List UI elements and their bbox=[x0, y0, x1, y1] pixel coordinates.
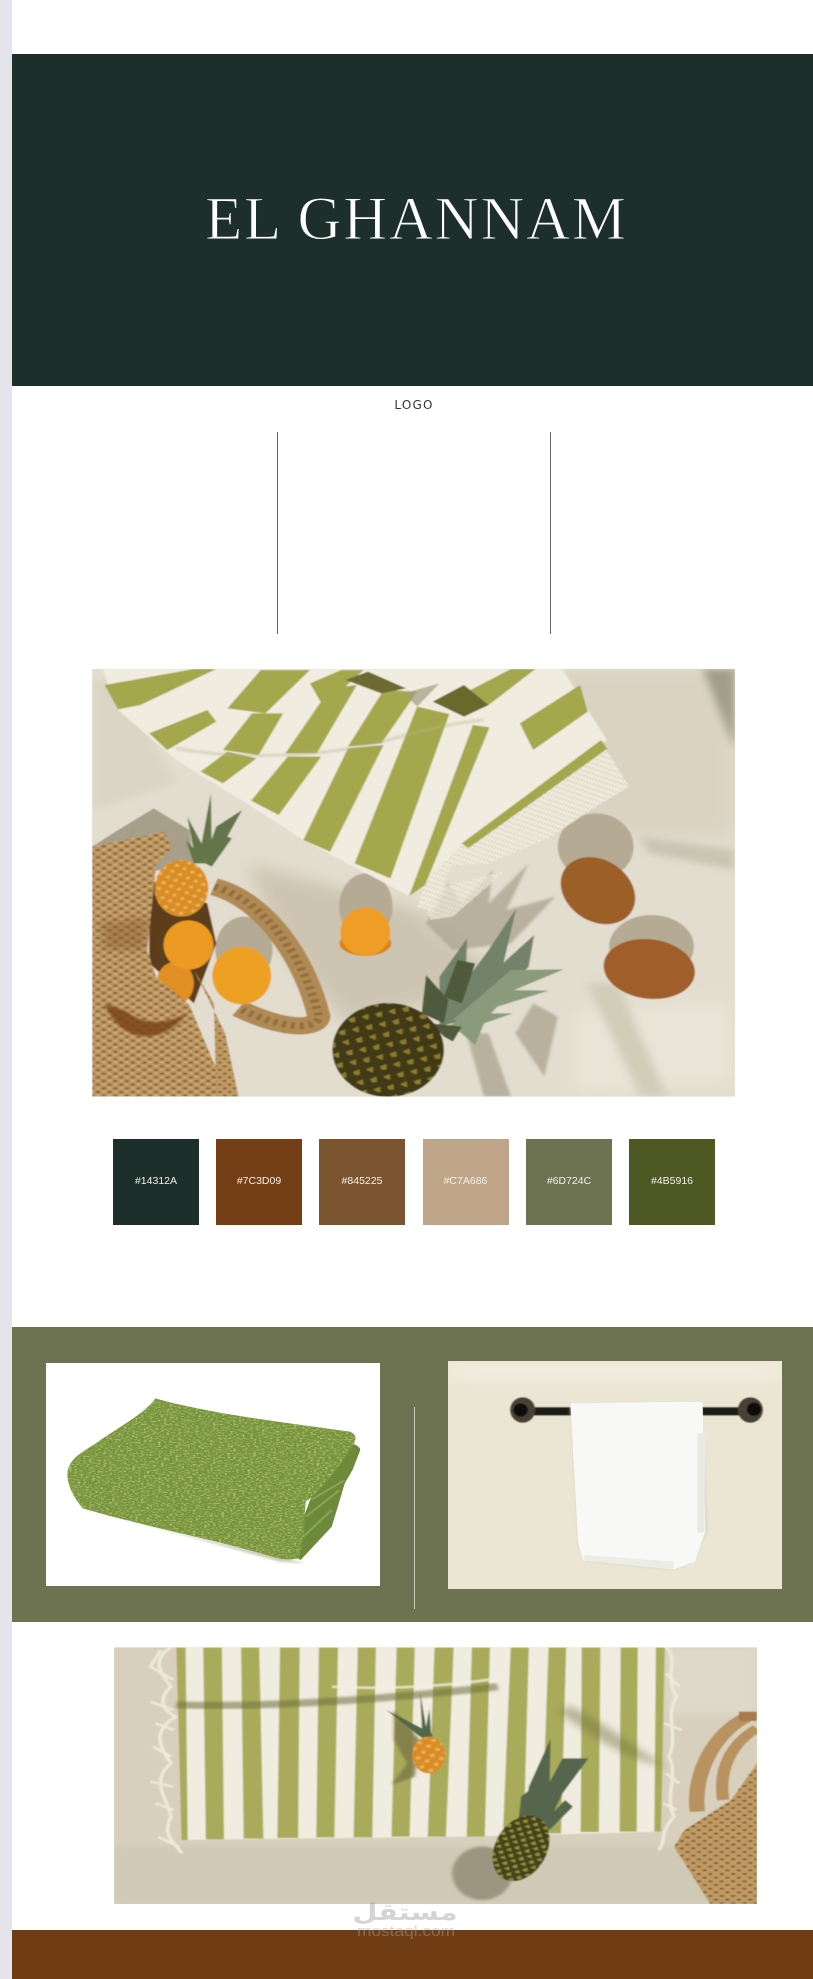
footer band bbox=[12, 1930, 813, 1979]
small pineapple bbox=[155, 793, 242, 917]
swatch C7A686: #C7A686 bbox=[444, 1175, 487, 1187]
fold shadows bbox=[176, 1652, 498, 1670]
big pineapple bbox=[452, 1738, 588, 1900]
divider line left bbox=[277, 432, 278, 634]
towel bbox=[176, 1647, 664, 1840]
panel: towel products band bbox=[12, 1327, 813, 1622]
left edge strip bbox=[0, 0, 12, 1979]
fruit cavity bbox=[149, 880, 216, 1003]
swatch 845225 bbox=[319, 1139, 405, 1224]
swatch 14312A bbox=[113, 1139, 199, 1224]
photo: white towel on bar bbox=[448, 1361, 782, 1589]
oranges bbox=[156, 962, 194, 1005]
divider line bbox=[414, 1407, 415, 1609]
watermark bbox=[352, 1900, 458, 1940]
divider line right bbox=[550, 432, 551, 634]
small pineapple bbox=[386, 1692, 445, 1785]
swatch 7C3D09: #7C3D09 bbox=[237, 1175, 281, 1187]
big pineapple bbox=[332, 908, 564, 1097]
swatch 4B5916 bbox=[629, 1139, 715, 1224]
object shadows bbox=[92, 808, 694, 983]
swatch 4B5916: #4B5916 bbox=[651, 1175, 693, 1187]
towel bbox=[102, 669, 607, 896]
straw bag bbox=[674, 1712, 757, 1904]
swatch 14312A: #14312A bbox=[135, 1175, 177, 1187]
centre orange bbox=[338, 938, 392, 956]
white towel bbox=[570, 1402, 708, 1570]
watermark: مستقل bbox=[352, 1900, 458, 1926]
swatch C7A686 bbox=[422, 1139, 508, 1224]
fringes bbox=[150, 1647, 682, 1853]
photo: towel, fruit and bag on sand bbox=[92, 669, 735, 1097]
palm shadows bbox=[426, 863, 558, 1097]
folded edge bbox=[290, 1441, 360, 1560]
coconuts bbox=[560, 856, 636, 925]
swatch 7C3D09 bbox=[216, 1139, 302, 1224]
swatch 6D724C: #6D724C bbox=[547, 1175, 591, 1187]
caption: logo: LOGO bbox=[394, 398, 434, 412]
photo: folded green towel bbox=[46, 1363, 380, 1586]
panel: logo header bbox=[12, 54, 813, 386]
towel bar bbox=[510, 1397, 763, 1423]
bag body bbox=[92, 832, 239, 1097]
green terry surface bbox=[67, 1398, 355, 1559]
bag handle bbox=[214, 887, 319, 1026]
swatch 6D724C bbox=[526, 1139, 612, 1224]
fringe bbox=[417, 846, 462, 909]
sand bbox=[87, 665, 743, 1102]
watermark: mostaql.com bbox=[357, 1923, 455, 1940]
swatch 845225: #845225 bbox=[342, 1175, 382, 1187]
photo: striped towel flat on sand bbox=[114, 1647, 757, 1904]
